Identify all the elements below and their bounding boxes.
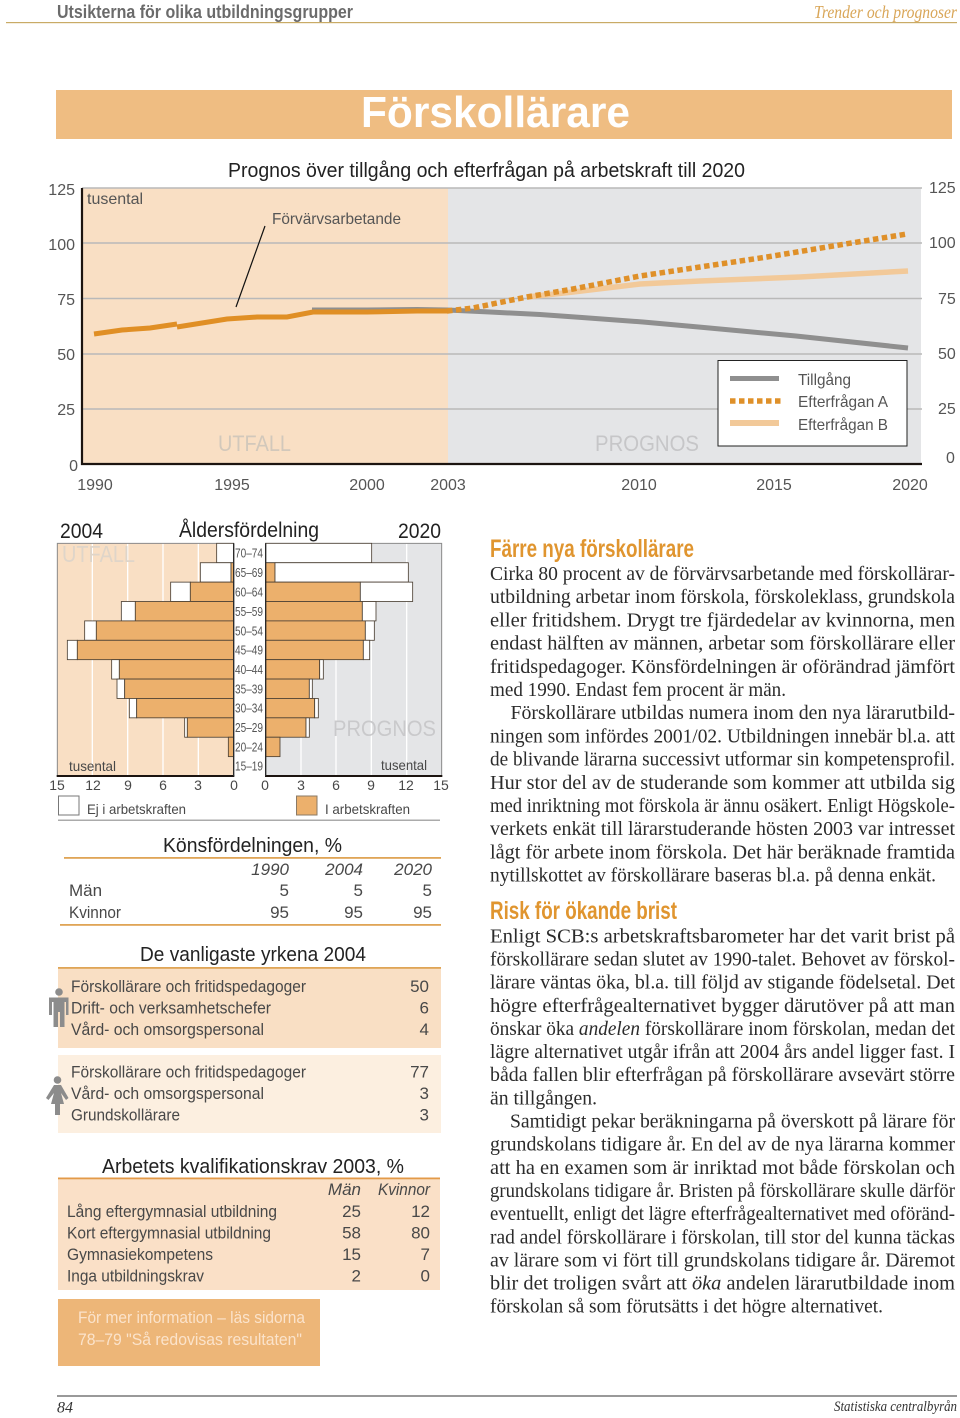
age group labels: 70–74 <box>235 546 263 560</box>
PROGNOS watermark: PROGNOS <box>333 716 436 741</box>
chart legend <box>718 360 907 446</box>
pyramid axis labels <box>49 777 449 793</box>
body text: båda fallen blir efterfrågan på förskollärare avsevärt större <box>490 1064 955 1086</box>
qualification requirements table: Arbetets kvalifikationskrav 2003, % <box>102 1156 404 1178</box>
body text: med 1990. Endast fem procent är män. <box>490 679 786 701</box>
age group labels: 15–19 <box>235 758 263 774</box>
body text: att ha en examen som är inriktad mot både förskolan och <box>490 1157 955 1179</box>
pyramid headings: 2020 <box>398 520 441 543</box>
pyramid legend: Ej i arbetskraften <box>87 801 186 817</box>
gender distribution table: 95 <box>344 903 363 922</box>
pyramid axis labels: 6 <box>159 777 167 793</box>
qualification requirements table: 80 <box>411 1224 430 1242</box>
panel: men: Vård- och omsorgspersonal <box>71 1020 264 1039</box>
qualification requirements table: Kort eftergymnasial utbildning <box>67 1224 271 1242</box>
UTFALL watermark: UTFALL <box>62 541 135 567</box>
age group labels: 45–49 <box>235 642 263 658</box>
body text: ningen som infördes 2001/02. Utbildningen innebär bl.a. att <box>490 725 955 747</box>
chart legend: Tillgång <box>798 371 851 389</box>
qualification requirements table: Gymnasiekompetens <box>67 1245 213 1264</box>
age group labels: 60–64 <box>235 584 263 600</box>
qualification requirements table: 25 <box>342 1202 361 1221</box>
pyramid axis labels: 3 <box>194 777 202 793</box>
pyramid legend <box>58 796 440 821</box>
body text: rad andel förskollärare i förskolan, till stor del kunna täckas <box>490 1226 955 1248</box>
body text: fritidspedagoger. Könsfördelningen är oförändrad jämfört <box>490 656 955 678</box>
gender distribution table: Män <box>69 881 102 900</box>
pyramid axis labels: 12 <box>85 777 101 793</box>
right y axis labels: 25 <box>938 401 956 418</box>
qualification requirements table: Kvinnor <box>378 1180 431 1199</box>
unit label: tusental <box>87 191 143 208</box>
text block: Risk för ökande brist <box>490 897 955 1318</box>
pyramid unit labels <box>69 757 427 774</box>
body text: lågt för arbete inom förskola. Det här beräknade framtida <box>490 841 955 863</box>
body text: grundskolans tidigare år. En del av de nya lärarna kommer <box>490 1134 955 1156</box>
body text: endast hälften av männen, arbetar som förskollärare eller <box>490 633 955 655</box>
gender distribution table: 95 <box>413 903 432 922</box>
qualification requirements table: Lång eftergymnasial utbildning <box>67 1202 277 1221</box>
panel: women: 3 <box>420 1106 429 1124</box>
chart title: Prognos över tillgång och efterfrågan på arbetskraft till 2020 <box>228 160 745 182</box>
chart plot background <box>81 188 922 465</box>
heading: Risk för ökande brist <box>490 897 678 925</box>
line: Efterfrågan A <box>447 234 907 311</box>
panel: men: Drift- och verksamhetschefer <box>71 998 271 1018</box>
callout: more information: 78–79 "Så redovisas resultaten" <box>78 1330 302 1349</box>
body text: lägre alternativet utgår ifrån att 2004 års andel ligger fast. I <box>490 1041 955 1063</box>
panel: women <box>58 1055 441 1133</box>
qualification requirements table: Inga utbildningskrav <box>67 1266 204 1286</box>
x axis labels: 1990 <box>77 477 113 494</box>
left y axis labels: 100 <box>48 237 75 254</box>
gender distribution table: 5 <box>354 881 363 900</box>
right y axis labels: 125 <box>929 180 956 197</box>
UTFALL label: UTFALL <box>218 431 291 456</box>
qualification requirements table: 0 <box>421 1266 430 1286</box>
pyramid axis labels: 9 <box>124 777 132 793</box>
right y axis labels <box>929 180 956 467</box>
x axis labels: 2000 <box>349 477 385 494</box>
pyramid axis labels: 9 <box>367 777 375 793</box>
chart legend: Efterfrågan B <box>798 416 888 434</box>
qualification requirements table: Män <box>328 1180 361 1199</box>
pyramid axis labels: 6 <box>332 777 340 793</box>
gender distribution table <box>60 835 441 926</box>
qualification requirements table: 12 <box>411 1202 430 1221</box>
body text: Enligt SCB:s arbetskraftsbarometer har det varit brist på <box>490 925 955 947</box>
body text: Hur stor del av de studerande som kommer att utbilda sig <box>490 772 955 794</box>
x axis labels: 2015 <box>756 477 792 494</box>
pyramid unit labels: tusental <box>381 757 427 773</box>
age pyramid <box>49 519 449 821</box>
panel: men: 4 <box>420 1020 429 1039</box>
gender distribution table: 1990 <box>251 860 290 879</box>
body text <box>490 563 955 887</box>
left y axis labels <box>48 182 78 475</box>
qualification requirements table: 15 <box>342 1245 361 1264</box>
pyramid unit labels: tusental <box>69 758 116 774</box>
line chart: labour supply and demand forecast <box>48 160 956 494</box>
page footer: 84 <box>57 1400 73 1416</box>
x axis labels: 1995 <box>214 477 250 494</box>
right y axis labels: 100 <box>929 235 956 252</box>
qualification requirements table: 2 <box>352 1266 361 1286</box>
icon: man <box>49 988 68 1027</box>
age group labels: 50–54 <box>235 624 263 638</box>
pyramid headings <box>60 519 441 543</box>
line: Förvärvsarbetande history <box>94 311 448 334</box>
age group labels: 25–29 <box>235 720 263 735</box>
age group labels: 30–34 <box>235 700 263 716</box>
left y axis labels: 0 <box>69 458 78 475</box>
body text: förskolan så som förutsätts i det högre alternativet. <box>490 1296 883 1318</box>
pyramid axis labels: 3 <box>297 777 305 793</box>
qualification requirements table <box>58 1156 440 1290</box>
body text: utbildning arbetar inom förskola, förskoleklass, grundskola <box>490 586 955 608</box>
most common occupations 2004: De vanligaste yrkena 2004 <box>140 944 366 966</box>
gender distribution table: 2004 <box>324 860 363 879</box>
body text: lärare väntas öka, bl.a. till följd av stigande födelsetal. Det <box>490 972 955 994</box>
callout: more information: För mer information – läs sidorna <box>78 1308 305 1327</box>
title banner: Förskollärare <box>361 88 630 137</box>
x axis labels: 2003 <box>430 477 466 494</box>
pyramid headings: 2004 <box>60 520 103 543</box>
PROGNOS label: PROGNOS <box>595 431 699 456</box>
age group labels: 40–44 <box>235 662 263 677</box>
left y axis labels: 25 <box>57 402 75 419</box>
line: Tillgång <box>312 310 908 348</box>
most common occupations 2004 <box>46 944 441 1133</box>
pyramid bars <box>57 543 442 776</box>
x axis labels <box>77 477 928 494</box>
age group labels <box>235 546 263 774</box>
callout: more information <box>58 1299 320 1366</box>
body text: de blivande lärarna successivt utformar sin kompetensprofil. <box>490 749 955 771</box>
line: Efterfrågan B <box>527 271 908 297</box>
body text <box>490 925 955 1318</box>
pyramid axis labels: 12 <box>398 777 414 793</box>
heading: Färre nya förskollärare <box>490 535 694 563</box>
page header <box>6 2 958 23</box>
x axis labels: 2010 <box>621 477 657 494</box>
age group labels: 55–59 <box>235 604 263 619</box>
body text: Samtidigt pekar beräkningarna på överskott på lärare för <box>510 1110 955 1132</box>
pyramid axis labels: 15 <box>433 777 449 793</box>
body text: Förskollärare utbildas numera inom den nya lärarutbild- <box>510 702 955 724</box>
gender distribution table: Könsfördelningen, % <box>163 835 342 857</box>
panel: women: Grundskollärare <box>71 1106 180 1124</box>
body text: eller fritidshem. Drygt tre fjärdedelar av kvinnorna, men <box>490 609 955 631</box>
body text: verkets enkät till lärarstuderande hösten 2003 var intresset <box>490 818 955 840</box>
qualification requirements table: 7 <box>421 1245 430 1264</box>
page footer <box>57 1396 957 1416</box>
right y axis labels: 75 <box>938 291 956 308</box>
gender distribution table: Kvinnor <box>69 903 121 922</box>
qualification requirements table: 58 <box>342 1224 361 1242</box>
panel: women: 3 <box>420 1084 429 1103</box>
pyramid legend: I arbetskraften <box>325 801 410 817</box>
left y axis labels: 125 <box>48 182 75 199</box>
gender distribution table: 5 <box>280 881 289 900</box>
x axis labels: 2020 <box>892 477 928 494</box>
body text: Cirka 80 procent av de förvärvsarbetande med förskollärar- <box>490 563 955 585</box>
body text: blir det troligen svårt att öka andelen lärarutbildade inom <box>490 1273 955 1295</box>
panel: women: Förskollärare och fritidspedagoger <box>71 1062 306 1082</box>
chart legend: Efterfrågan A <box>798 393 888 411</box>
panel: men: 50 <box>410 977 429 996</box>
left y axis labels: 50 <box>57 347 75 364</box>
text block: Färre nya förskollärare <box>490 535 955 887</box>
page header: Utsikterna för olika utbildningsgrupper <box>57 2 353 22</box>
left y axis labels: 75 <box>57 292 75 309</box>
panel: women: Vård- och omsorgspersonal <box>71 1084 264 1103</box>
body text: än tillgången. <box>490 1087 597 1109</box>
panel: men: 6 <box>420 998 429 1018</box>
panel: men: Förskollärare och fritidspedagoger <box>71 977 306 996</box>
icon: woman <box>46 1076 68 1115</box>
body text: önskar öka andelen förskollärare inom förskolan, medan det <box>490 1018 955 1040</box>
right y axis labels: 50 <box>938 346 956 363</box>
body text: av lärare som vi fört till grundskolans tidigare år. Däremot <box>490 1249 955 1271</box>
panel: women: 77 <box>410 1062 429 1082</box>
pyramid headings: Åldersfördelning <box>179 519 319 542</box>
age group labels: 65–69 <box>235 565 263 580</box>
gender distribution table: 95 <box>270 903 289 922</box>
pyramid axis labels: 0 <box>261 777 269 793</box>
gender distribution table: 2020 <box>393 860 433 879</box>
annotation: Förvärvsarbetande: Förvärvsarbetande <box>272 211 401 228</box>
age group labels: 35–39 <box>235 682 263 696</box>
title banner <box>56 88 952 139</box>
body text: förskollärare sedan slutet av 1990-talet. Behovet av förskol- <box>490 948 955 970</box>
right y axis labels: 0 <box>946 450 955 467</box>
pyramid axis labels: 15 <box>49 777 65 793</box>
pyramid axis labels: 0 <box>230 777 238 793</box>
body text: högre efterfrågealternativet bygger därutöver på att man <box>490 995 955 1017</box>
panel: men <box>58 967 441 1048</box>
gender distribution table: 5 <box>423 881 432 900</box>
annotation: Förvärvsarbetande <box>236 211 401 307</box>
body text: nytillskottet av förskollärare baseras bl.a. på denna enkät. <box>490 865 936 887</box>
age group labels: 20–24 <box>235 740 263 754</box>
